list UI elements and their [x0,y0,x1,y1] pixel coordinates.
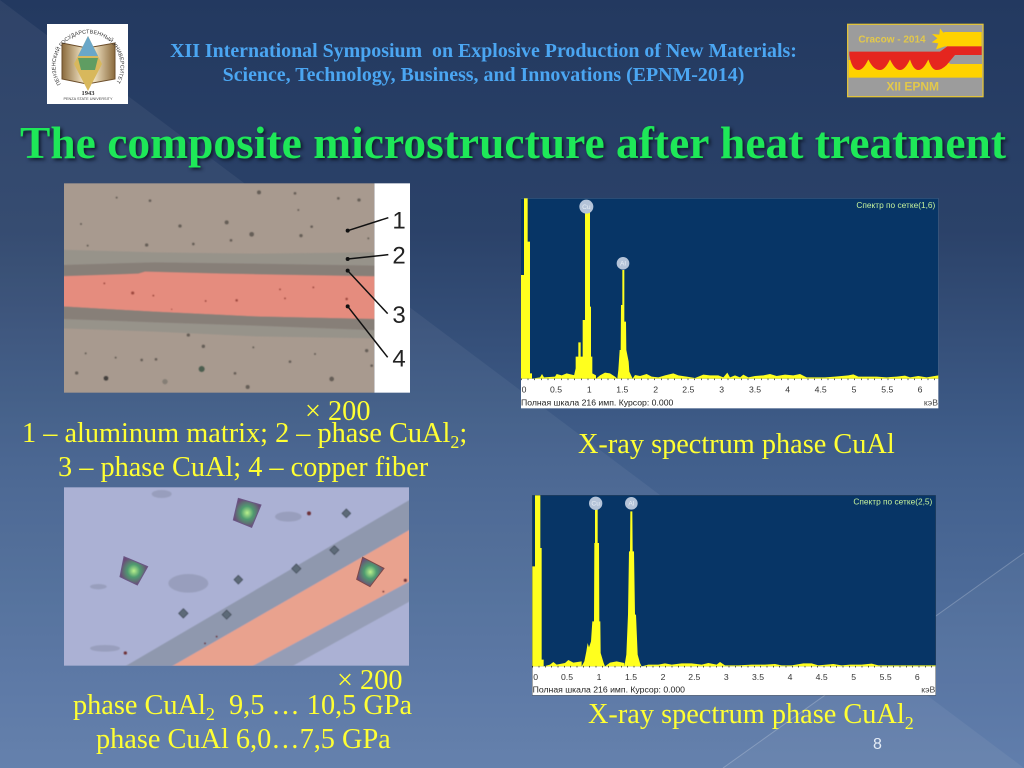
logo: Cracow 2014 XII EPNM: Cracow - 2014 [858,34,926,45]
chart caption and axis labels: 5.5 [881,384,894,394]
chart caption and axis labels: 1.5 [616,384,629,394]
chart caption and axis labels: 6 [915,672,920,682]
spectrum chart: phase CuAl [521,198,938,408]
text: 3 – phase CuAl; 4 – copper fiber [58,452,428,483]
element markers [579,200,629,270]
callout numbers [392,207,406,372]
caption: spectrum phase CuAl2: X-ray spectrum phase CuAl2 [588,699,914,733]
element markers: Cu [582,204,591,211]
chart caption and axis labels: 5 [852,384,857,394]
chart caption and axis labels: 3.5 [752,672,764,682]
logo: Penza State University: PENZA STATE UNIVERSITY [63,97,113,101]
header: symposium name line 2: Science, Technology, Business, and Innovations (EPNM-2014) [223,64,744,86]
chart caption and axis labels: 0 [522,384,527,394]
callout numbers: 1 [392,207,406,234]
chart caption and axis labels [521,200,938,407]
chart caption and axis labels: кэВ [924,397,938,407]
chart caption and axis labels: 4.5 [816,672,828,682]
chart caption and axis labels: Полная шкала 216 имп. Курсор: 0.000 [533,684,685,694]
chart caption and axis labels: Полная шкала 216 имп. Курсор: 0.000 [521,397,674,407]
title: The composite microstructure after heat treatment [20,117,1006,168]
logo: Cracow 2014 XII EPNM: XII EPNM [886,80,939,94]
element markers: Al [628,501,635,508]
chart caption and axis labels: 2.5 [688,672,701,682]
text: phase CuAl 6,0…7,5 GPa [96,724,391,755]
chart caption and axis labels: кэВ [921,684,936,694]
chart caption and axis labels: 6 [918,384,923,394]
chart caption and axis labels: 4 [788,672,793,682]
chart caption and axis labels: 0 [533,672,538,682]
chart caption and axis labels: 5.5 [880,672,892,682]
chart caption and axis labels: Спектр по сетке(2,5) [853,497,933,507]
chart caption and axis labels: 2 [653,384,658,394]
logo: Penza State University: ПЕНЗЕНСКИЙ ГОСУДАРСТВЕННЫЙ УНИВЕРСИТЕТ [52,30,124,86]
text: phase CuAl2 9,5 … 10,5 GPa [73,690,412,724]
magnification label, micrograph 2: × 200 [337,665,402,696]
chart caption and axis labels: 3 [724,672,729,682]
chart caption and axis labels: 3.5 [749,384,761,394]
callout numbers: 2 [392,243,406,270]
chart caption and axis labels [533,497,936,694]
callout lines and dots [346,218,388,357]
hardness values [73,690,412,755]
element markers [589,497,638,510]
micrograph 1 with numbered callouts [64,183,410,393]
logo: Cracow 2014 XII EPNM [847,24,984,98]
element markers: Cu [591,501,600,508]
chart caption and axis labels: 0.5 [550,384,562,394]
magnification label, micrograph 1: × 200 [305,396,370,427]
chart caption and axis labels: 4 [785,384,790,394]
chart caption and axis labels: 1 [587,384,592,394]
element markers: Al [620,261,626,268]
page number: 8 [873,736,882,753]
callout numbers: 4 [392,345,406,372]
chart caption and axis labels: 2.5 [682,384,695,394]
chart caption and axis labels: 2 [661,672,666,682]
chart caption and axis labels: 0.5 [561,672,573,682]
chart caption and axis labels: 4.5 [815,384,827,394]
indentation marks [120,498,384,587]
logo: Penza State University [47,24,128,104]
text: 1 – aluminum matrix; 2 – phase CuAl2; [22,418,467,452]
spectrum chart: phase CuAl2 [532,495,936,696]
chart caption and axis labels: 1.5 [625,672,637,682]
legend for micrograph 1 [22,418,467,483]
callout numbers: 3 [392,302,406,329]
chart caption and axis labels: 5 [851,672,856,682]
chart caption and axis labels: 1 [597,672,602,682]
micrograph 2 with hardness indentations [64,487,409,666]
logo: Penza State University: 1943 [82,90,95,97]
caption: spectrum phase CuAl: X-ray spectrum phase CuAl [578,429,895,460]
chart caption and axis labels: 3 [719,384,724,394]
header: symposium name line 1: XII International Symposium on Explosive Production of New Materials: [170,40,797,62]
chart caption and axis labels: Спектр по сетке(1,6) [856,200,936,210]
